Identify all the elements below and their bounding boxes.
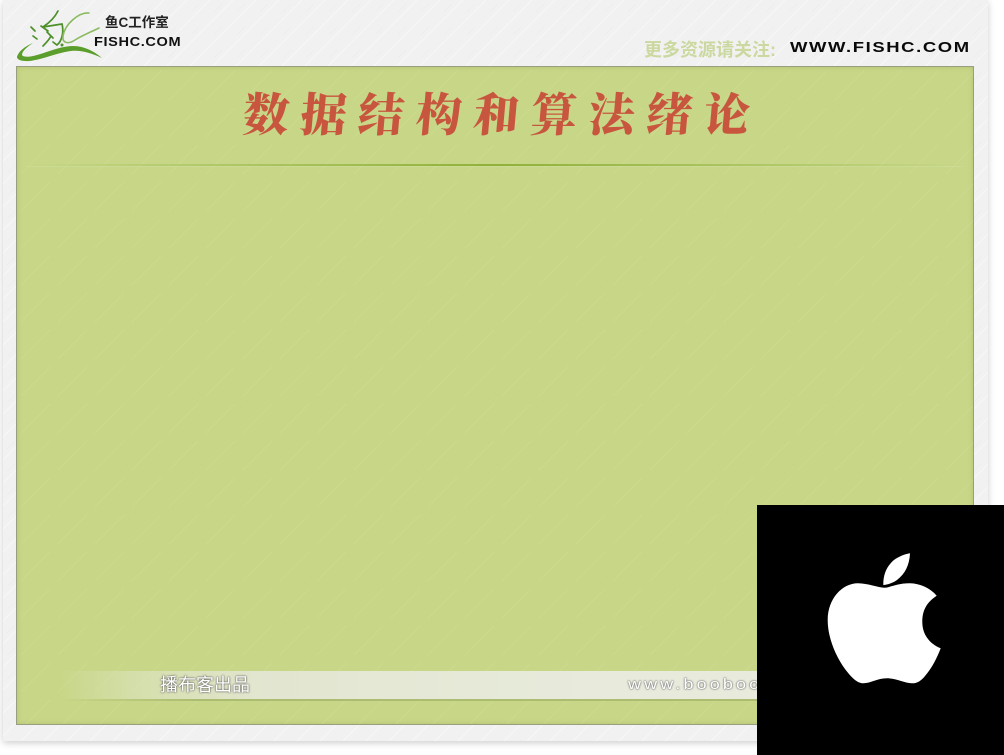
panel: black corner square with apple logo [757,505,1004,755]
footer band [60,671,973,699]
footer shadow strip [60,699,973,701]
text: follow prompt: 更多资源请关注: [644,40,776,60]
icon: apple logo [828,553,941,684]
logo text: studio name: 鱼C工作室 [105,15,169,30]
logo text: FISHC.COM: FISHC.COM [94,34,181,49]
footer text: producer: 播布客出品 [160,675,250,695]
footer text: website: www.boobooke.com [628,676,839,693]
logo: FishC script mark [17,10,102,62]
title: 数据结构和算法绪论 [241,90,764,141]
text: website address: WWW.FISHC.COM [790,39,971,56]
